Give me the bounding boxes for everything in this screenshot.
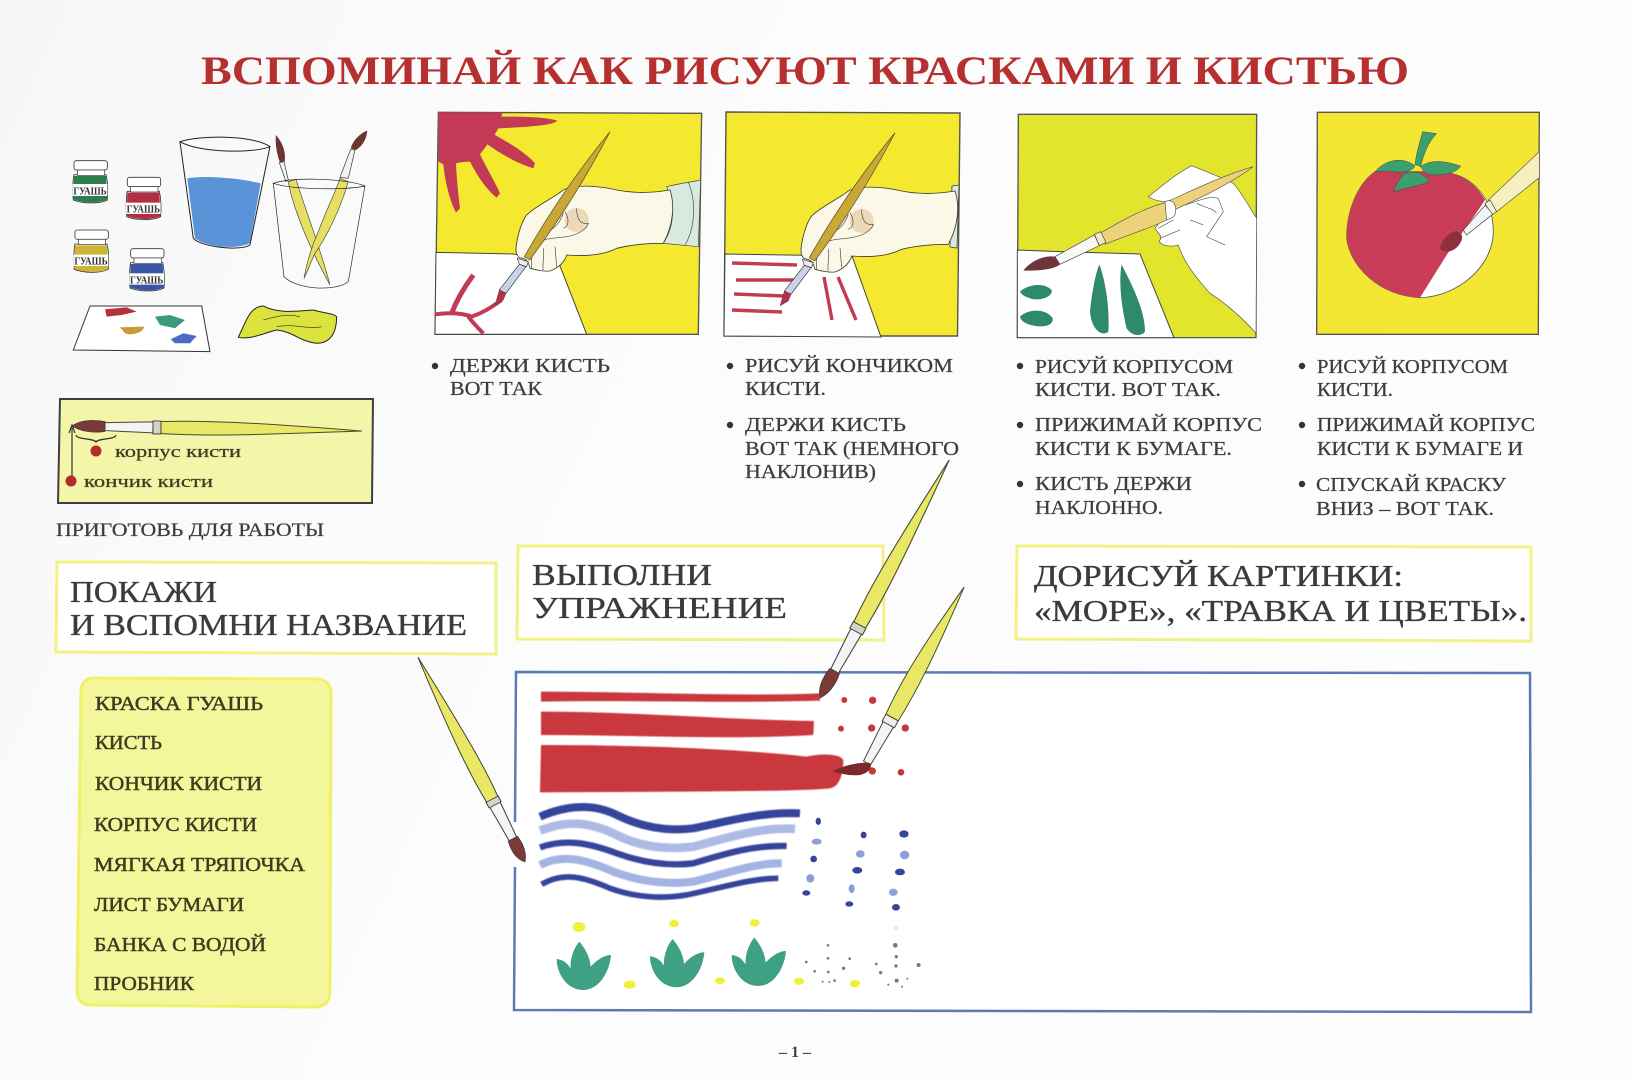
panel: hold the brush xyxy=(435,112,702,334)
icon: red gouache jar xyxy=(126,177,161,220)
text block: body instructions one xyxy=(1017,355,1262,519)
text block: tip instructions: КИСТИ. xyxy=(745,378,826,400)
panel: exercise frame xyxy=(514,672,1531,1012)
icon: soft rag xyxy=(238,306,337,343)
panel: brush parts diagram xyxy=(58,399,373,503)
panel: word list xyxy=(77,678,331,1007)
text block: hold instructions xyxy=(432,355,610,400)
icon: test palette paper with blobs xyxy=(73,306,210,352)
text block: tip instructions: ДЕРЖИ КИСТЬ xyxy=(745,414,906,436)
panel: tomato xyxy=(1317,112,1539,334)
icon: glass with brushes xyxy=(273,131,367,288)
text block: body instructions one: КИСТИ. ВОТ ТАК. xyxy=(1035,379,1221,401)
illustration: art supplies xyxy=(73,131,367,352)
icon: blue gouache jar: ГУАШЬ xyxy=(130,275,163,286)
text block: body instructions two: ВНИЗ – ВОТ ТАК. xyxy=(1316,498,1494,520)
panel: word list: ЛИСТ БУМАГИ xyxy=(94,895,244,916)
yellow dots xyxy=(573,919,899,989)
text block: tip instructions: ВОТ ТАК (НЕМНОГО xyxy=(745,438,959,460)
panel: finish the pictures heading: ДОРИСУЙ КАРТИНКИ: xyxy=(1034,558,1403,593)
panel: word list: КОНЧИК КИСТИ xyxy=(95,774,262,795)
panel: show and name heading: И ВСПОМНИ НАЗВАНИЕ xyxy=(70,607,467,642)
panel: finish the pictures heading xyxy=(1016,546,1531,641)
panel: word list: КОРПУС КИСТИ xyxy=(94,815,257,836)
text block: body instructions one: ПРИЖИМАЙ КОРПУС xyxy=(1035,413,1262,436)
text block: hold instructions: ДЕРЖИ КИСТЬ xyxy=(450,355,610,377)
panel: draw with brush tip xyxy=(724,112,960,337)
light blue dots xyxy=(806,839,909,896)
text block: body instructions two: КИСТИ. xyxy=(1317,379,1393,401)
red dots xyxy=(838,697,909,776)
icon: blue gouache jar xyxy=(129,249,164,291)
grey dots xyxy=(805,943,921,988)
chart: exercise strokes xyxy=(540,692,921,990)
panel: word list: КРАСКА ГУАШЬ xyxy=(95,694,263,715)
icon: yellow gouache jar: ГУАШЬ xyxy=(74,257,108,268)
blue waves xyxy=(540,807,800,897)
page number: – 1 – xyxy=(778,1044,812,1061)
text block: hold instructions: ВОТ ТАК xyxy=(450,378,543,400)
panel: exercise heading: УПРАЖНЕНИЕ xyxy=(532,590,787,625)
arrow: to brush tip xyxy=(69,425,116,477)
text block: tip instructions xyxy=(727,354,959,483)
text block: body instructions one: КИСТЬ ДЕРЖИ xyxy=(1035,473,1192,495)
panel: finish the pictures heading: «МОРЕ», «ТРАВКА И ЦВЕТЫ». xyxy=(1034,593,1527,628)
text block: body instructions one: НАКЛОННО. xyxy=(1035,497,1163,519)
blue dots xyxy=(802,818,909,911)
title: ВСПОМИНАЙ КАК РИСУЮТ КРАСКАМИ И КИСТЬЮ xyxy=(201,48,1409,93)
panel: draw with brush body xyxy=(1017,114,1257,338)
panel: word list: БАНКА С ВОДОЙ xyxy=(94,935,266,956)
text block: tip instructions: РИСУЙ КОНЧИКОМ xyxy=(745,354,953,377)
text block: body instructions two: РИСУЙ КОРПУСОМ xyxy=(1317,355,1508,378)
panel: exercise heading xyxy=(517,546,884,640)
text block: body instructions two: ПРИЖИМАЙ КОРПУС xyxy=(1317,413,1535,436)
icon: red gouache jar: ГУАШЬ xyxy=(127,205,160,216)
icon: green gouache jar xyxy=(73,161,108,203)
panel: word list: ПРОБНИК xyxy=(94,974,195,995)
panel: show and name heading xyxy=(56,562,496,654)
text block: body instructions two: КИСТИ К БУМАГЕ И xyxy=(1317,438,1523,460)
icon: left long brush xyxy=(411,654,531,865)
panel: word list: МЯГКАЯ ТРЯПОЧКА xyxy=(94,855,305,876)
caption: prepare: ПРИГОТОВЬ ДЛЯ РАБОТЫ xyxy=(56,520,324,541)
panel: exercise heading: ВЫПОЛНИ xyxy=(532,557,712,592)
green leaves xyxy=(557,938,786,990)
icon: top long brush xyxy=(813,456,956,702)
panel: brush parts diagram: корпус кисти xyxy=(115,442,241,461)
icon: yellow gouache jar xyxy=(74,230,109,272)
icon: glass of water xyxy=(180,137,270,248)
panel: word list: КИСТЬ xyxy=(95,733,162,754)
red stripes xyxy=(540,692,843,792)
text block: tip instructions: НАКЛОНИВ) xyxy=(745,461,876,483)
text block: body instructions one: КИСТИ К БУМАГЕ. xyxy=(1035,438,1232,460)
icon: labelled brush xyxy=(72,419,362,438)
panel: brush parts diagram: кончик кисти xyxy=(84,472,213,491)
text block: body instructions one: РИСУЙ КОРПУСОМ xyxy=(1035,355,1233,378)
icon: third long brush xyxy=(833,583,971,775)
panel: show and name heading: ПОКАЖИ xyxy=(70,574,217,609)
text block: body instructions two xyxy=(1299,355,1535,520)
icon: green gouache jar: ГУАШЬ xyxy=(73,186,107,197)
text block: body instructions two: СПУСКАЙ КРАСКУ xyxy=(1316,473,1507,496)
